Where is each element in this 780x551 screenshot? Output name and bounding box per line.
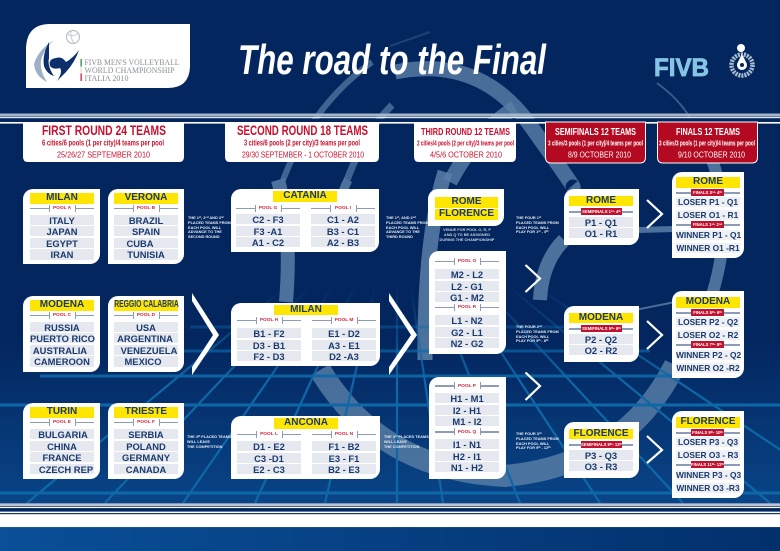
header: third round: 2 cities/4 pools (2 per city)/3 teams per pool [417, 138, 514, 148]
teams: CUBA [126, 238, 154, 249]
winners matches: WINNER O2 -R2 [676, 363, 740, 373]
winners matches: WINNER P2 - Q2 [676, 350, 741, 360]
matches I: A2 - B3 [327, 237, 359, 248]
note: four 3rd placed: PLACED TEAMS FROM [516, 437, 559, 441]
tag: semifinals 5-8: SEMIFINALS 5ᵗʰ- 8ᵗʰ [582, 326, 621, 331]
tag: finals 5-6: FINALS 5ᵗʰ- 6ᵗʰ [693, 310, 722, 315]
matches H: F2 - D3 [253, 351, 285, 362]
tag: finals 9-10: FINALS 9ᵗʰ- 10ᵗʰ [692, 430, 723, 435]
matches: O3 - R3 [585, 461, 617, 472]
losers matches [676, 197, 740, 220]
pool label: POOL A [53, 206, 71, 211]
note: four 1st placed [516, 216, 559, 235]
note: second round advance: THIRD ROUND [386, 235, 413, 239]
venue Rome: ROME [452, 196, 482, 207]
losers matches: LOSER O3 - R3 [678, 450, 738, 460]
matches: O2 - R2 [585, 345, 617, 356]
pool label: POOL B [137, 206, 155, 211]
note: four 2nd placed [516, 325, 559, 344]
pool label R: POOL R [458, 305, 476, 310]
matches: P3 - Q3 [585, 450, 617, 460]
losers matches: LOSER O1 - R1 [678, 210, 738, 220]
city heading [676, 297, 740, 308]
matches M [312, 328, 376, 362]
pool label L: POOL L [260, 432, 278, 437]
panel: Turin pool E [23, 403, 100, 479]
city heading: ROME [693, 176, 723, 187]
note: second round advance: EACH POOL WILL [386, 226, 419, 230]
pool label G: POOL G [259, 206, 277, 211]
note: first round advance: SECOND ROUND [188, 235, 220, 239]
teams: SERBIA [128, 429, 164, 440]
note: four 2nd placed: THE FOUR 2ⁿᵈ [516, 325, 542, 329]
header: first round: 25/26/27 SEPTEMBER 2010 [57, 150, 150, 160]
winners matches: WINNER P1 - Q1 [676, 230, 741, 240]
teams: IRAN [51, 249, 73, 260]
matches: P1 - Q1 [585, 216, 617, 228]
winners matches: WINNER P3 - Q3 [676, 470, 741, 480]
matches: P2 - Q2 [585, 334, 617, 344]
teams: USA [136, 322, 156, 332]
city heading: ROME [586, 194, 616, 206]
note: first round advance: THE 1ˢᵗ, 2ⁿᵈ AND 3ʳᵈ [188, 216, 223, 220]
pool label I: POOL I [335, 206, 351, 211]
city heading: MODENA [40, 299, 84, 310]
panel: finals Rome [672, 172, 744, 258]
city heading [114, 193, 178, 204]
note: venue to be assigned [440, 228, 494, 242]
pool label M: POOL M [335, 318, 353, 323]
note: second round advance [386, 216, 429, 239]
panel: Ancona pools L and N [231, 416, 380, 479]
panel: semifinal Modena [564, 306, 639, 362]
city heading [30, 193, 94, 204]
winners matches: WINNER O3 -R3 [676, 483, 740, 493]
logo: FIVB Men's Volleyball World Championship Italia 2010: WORLD CHAMPIONSHIP [84, 66, 175, 75]
pool label: POOL D [137, 313, 155, 318]
header: first round [23, 123, 184, 162]
note: venue to be assigned: DURING THE CHAMPIONSHIP [440, 238, 494, 242]
header: second round: 29/30 SEPTEMBER - 1 OCTOBER 2010 [242, 150, 364, 160]
city heading [274, 304, 338, 315]
city heading [569, 312, 633, 323]
panel: Milan pools H and M [231, 303, 380, 366]
teams [114, 429, 178, 475]
note: second round leave [384, 435, 429, 449]
matches G: F3 -A1 [254, 226, 282, 237]
header: first round: 6 cities/6 pools (1 per city)/4 teams per pool [42, 138, 164, 148]
winners matches [676, 470, 740, 493]
icon: FIVB centenary emblem [729, 44, 755, 78]
matches [569, 216, 633, 240]
note: four 2nd placed: PLACED TEAMS FROM [516, 330, 559, 334]
pool label H: POOL H [260, 318, 278, 323]
header: third round [414, 124, 516, 162]
panel: Verona pool B [108, 189, 184, 264]
matches R [435, 315, 499, 350]
header: second round [225, 123, 379, 162]
city heading: MODENA [579, 312, 623, 322]
matches P: M1 - I2 [452, 416, 482, 427]
matches G [236, 214, 300, 248]
teams: POLAND [126, 441, 166, 452]
city heading: FLORENCE [574, 428, 628, 438]
tag: finals 3-4: FINALS 3ʳᵈ- 4ᵗʰ [693, 190, 722, 195]
header: second round: 3 cities/6 pools (2 per city)/3 teams per pool [244, 138, 360, 148]
teams: ARGENTINA [117, 333, 173, 344]
tag: finals 11-12: FINALS 11ᵗʰ- 12ᵗʰ [691, 462, 724, 467]
note: four 2nd placed: PLAY FOR 5ᵗʰ - 8ᵗʰ [516, 339, 548, 343]
matches L [237, 441, 301, 475]
panel: Reggio Calabria pool D [108, 296, 184, 372]
teams: PUERTO RICO [30, 333, 95, 344]
tag: semifinals 1-4: SEMIFINALS 1ˢᵗ- 4ᵗʰ [582, 209, 621, 214]
matches N: B2 - E3 [328, 464, 360, 475]
matches M: D2 -A3 [329, 351, 359, 362]
matches O: M2 - L2 [451, 269, 483, 280]
pool label P: POOL P [458, 384, 476, 388]
city heading: MILAN [290, 304, 322, 314]
teams: GERMANY [122, 452, 170, 463]
header: semifinals [545, 122, 646, 164]
teams [30, 214, 94, 260]
winners matches [676, 230, 740, 253]
matches N [312, 441, 376, 475]
matches O: G1 - M2 [450, 292, 484, 303]
matches L: C3 -D1 [254, 453, 284, 464]
header: second round: SECOND ROUND 18 TEAMS [237, 123, 368, 138]
note: first round advance [188, 216, 231, 239]
matches H: D3 - B1 [253, 340, 285, 351]
matches L: E2 - C3 [253, 464, 285, 475]
teams [114, 214, 178, 260]
tag: finals 1-2: FINALS 1ˢᵗ- 2ⁿᵈ [693, 222, 722, 227]
panel: pools P and Q [429, 377, 506, 478]
note: four 1st placed: EACH POOL WILL [516, 226, 549, 230]
winners matches: WINNER O1 -R1 [676, 243, 740, 253]
teams: SPAIN [132, 226, 160, 237]
note: four 2nd placed: EACH POOL WILL [516, 335, 549, 339]
FIVB logo: FIVB [654, 54, 709, 82]
panel: pools O and R [429, 251, 506, 354]
panel: Modena pool C [23, 296, 100, 372]
note: second round leave: WILL LEAVE [384, 440, 407, 444]
teams [30, 322, 95, 367]
matches P [435, 393, 499, 428]
teams: TUNISIA [127, 249, 165, 260]
teams: VENEZUELA [121, 345, 177, 356]
matches I: B3 - C1 [327, 226, 359, 237]
header: finals: FINALS 12 TEAMS [676, 126, 740, 138]
matches H [237, 328, 301, 362]
matches [569, 450, 633, 473]
note: second round leave: THE COMPETITION [384, 445, 419, 449]
panel: Milan pool A [23, 189, 100, 264]
note: first round leave: THE 4ᵗʰ PLACED TEAMS [187, 435, 232, 439]
matches I [311, 214, 375, 248]
city heading: REGGIO CALABRIA [114, 299, 178, 310]
note: four 1st placed: PLAY FOR 1ˢᵗ - 4ᵗʰ [516, 230, 548, 234]
losers matches: LOSER P3 - Q3 [678, 437, 738, 447]
teams: ITALY [49, 214, 75, 226]
note: four 1st placed: THE FOUR 1ˢᵗ [516, 216, 541, 220]
note: four 3rd placed: PLAY FOR 9ᵗʰ - 12ᵗʰ [516, 446, 550, 450]
panel: Rome and Florence venues [428, 189, 504, 226]
panel: finals Florence [672, 411, 744, 498]
losers matches [676, 317, 740, 340]
teams: CHINA [47, 441, 77, 452]
teams: CZECH REP [39, 464, 93, 475]
note: four 1st placed: PLACED TEAMS FROM [516, 221, 559, 225]
note: first round advance: ADVANCE TO THE [188, 230, 222, 234]
tag: semifinals 9-12: SEMIFINALS 9ᵗʰ- 12ᵗʰ [581, 442, 622, 447]
city heading [676, 177, 740, 188]
pool label N: POOL N [335, 432, 353, 437]
matches I: C1 - A2 [327, 214, 359, 225]
losers matches [676, 437, 740, 460]
venue Rome [435, 197, 498, 208]
matches M: E1 - D2 [328, 328, 360, 339]
city heading [274, 418, 338, 428]
losers matches: LOSER P2 - Q2 [678, 317, 738, 327]
teams: CAMEROON [34, 356, 90, 367]
teams: JAPAN [46, 226, 78, 237]
city heading [273, 191, 337, 202]
city heading [30, 300, 94, 310]
note: first round advance: EACH POOL WILL [188, 226, 221, 230]
losers matches: LOSER O2 - R2 [678, 330, 738, 340]
city heading: CATANIA [283, 190, 327, 201]
teams: RUSSIA [44, 322, 80, 332]
teams: BULGARIA [38, 429, 88, 440]
teams: CANADA [126, 464, 166, 475]
matches Q: N1 - H2 [451, 462, 483, 473]
teams: BRAZIL [129, 214, 163, 226]
note: first round leave [187, 435, 232, 449]
title: The road to the Final [238, 36, 547, 83]
note: second round advance: PLACED TEAMS FROM [386, 221, 429, 225]
header: finals [657, 122, 758, 164]
panel: Trieste pool F [108, 403, 184, 479]
matches P: H1 - M1 [450, 393, 484, 404]
matches R: G2 - L1 [451, 327, 483, 338]
losers matches: LOSER P1 - Q1 [678, 197, 738, 207]
city heading: ANCONA [284, 417, 328, 428]
logo: FIVB Men's Volleyball World Championship Italia 2010 [26, 24, 190, 88]
panel: finals Modena [672, 291, 744, 378]
teams: MEXICO [124, 356, 161, 367]
teams: AUSTRALIA [33, 345, 87, 356]
header: third round: THIRD ROUND 12 TEAMS [421, 126, 510, 138]
logo: FIVB Men's Volleyball World Championship Italia 2010: ITALIA 2010 [84, 74, 128, 83]
pool label: POOL E [53, 420, 71, 425]
city heading: MILAN [46, 192, 78, 203]
panel: Catania pools G and I [231, 189, 379, 252]
note: second round leave: THE 3ʳᵈ PLACED TEAMS [384, 435, 429, 439]
matches L: D1 - E2 [253, 441, 285, 452]
winners matches [676, 350, 740, 373]
pool label: POOL C [53, 313, 71, 318]
matches O [435, 269, 499, 303]
venue Florence: FLORENCE [439, 208, 494, 219]
city heading: TURIN [47, 406, 77, 417]
city heading: MODENA [686, 296, 730, 307]
pool label: POOL F [137, 420, 155, 425]
header: semifinals: 8/9 OCTOBER 2010 [568, 150, 631, 160]
note: venue to be assigned: VENUE FOR POOL O, R, P [443, 228, 491, 232]
matches R: L1 - N2 [451, 315, 483, 326]
teams [30, 429, 94, 475]
header: third round: 4/5/6 OCTOBER 2010 [430, 150, 502, 160]
matches P: I2 - H1 [453, 405, 481, 416]
matches Q: H2 - I1 [453, 451, 481, 462]
matches: O1 - R1 [585, 228, 617, 239]
note: four 3rd placed [516, 432, 559, 451]
note: first round leave: WILL LEAVE [187, 440, 210, 444]
matches M: A3 - E1 [328, 340, 360, 351]
teams: FRANCE [42, 452, 82, 463]
matches H: B1 - F2 [253, 328, 285, 339]
matches Q [435, 439, 499, 474]
matches G: A1 - C2 [252, 237, 284, 248]
matches O: L2 - G1 [451, 281, 483, 292]
note: four 3rd placed: EACH POOL WILL [516, 442, 549, 446]
city heading: TRIESTE [125, 406, 167, 417]
teams [114, 322, 178, 367]
header: finals: 9/10 OCTOBER 2010 [678, 150, 745, 160]
tag: finals 7-8: FINALS 7ᵗʰ- 8ᵗʰ [693, 342, 722, 347]
header: semifinals: SEMIFINALS 12 TEAMS [555, 126, 636, 138]
logo: FIVB Men's Volleyball World Championship Italia 2010: FIVB MEN'S VOLLEYBALL [84, 58, 180, 67]
panel: semifinal Rome [564, 189, 639, 245]
matches R: N2 - G2 [451, 338, 483, 349]
note: second round advance: THE 1ˢᵗ, AND 2ⁿᵈ [386, 216, 416, 220]
note: first round leave: THE COMPETITION [187, 445, 222, 449]
pool label Q: POOL Q [458, 430, 476, 434]
matches N: E3 - F1 [329, 453, 359, 464]
city heading: VERONA [125, 192, 167, 203]
pool label O: POOL O [458, 259, 476, 264]
city heading [569, 196, 633, 206]
matches [569, 334, 633, 357]
matches G: C2 - F3 [252, 214, 284, 225]
panel: semifinal Florence [564, 422, 639, 478]
city heading [30, 407, 94, 418]
header: first round: FIRST ROUND 24 TEAMS [42, 123, 166, 138]
header: semifinals: 3 cities/3 pools (1 per city)/4 teams per pool [548, 138, 643, 148]
matches Q: I1 - N1 [453, 439, 481, 450]
note: second round advance: ADVANCE TO THE [386, 230, 420, 234]
city heading: FLORENCE [680, 416, 736, 427]
city heading [114, 407, 178, 418]
matches N: F1 - B2 [328, 441, 360, 452]
note: first round advance: PLACED TEAMS FROM [188, 221, 231, 225]
note: venue to be assigned: AND Q TO BE ASSIGNED [444, 233, 490, 237]
note: four 3rd placed: THE FOUR 3ʳᵈ [516, 432, 541, 436]
teams: EGYPT [46, 238, 78, 249]
